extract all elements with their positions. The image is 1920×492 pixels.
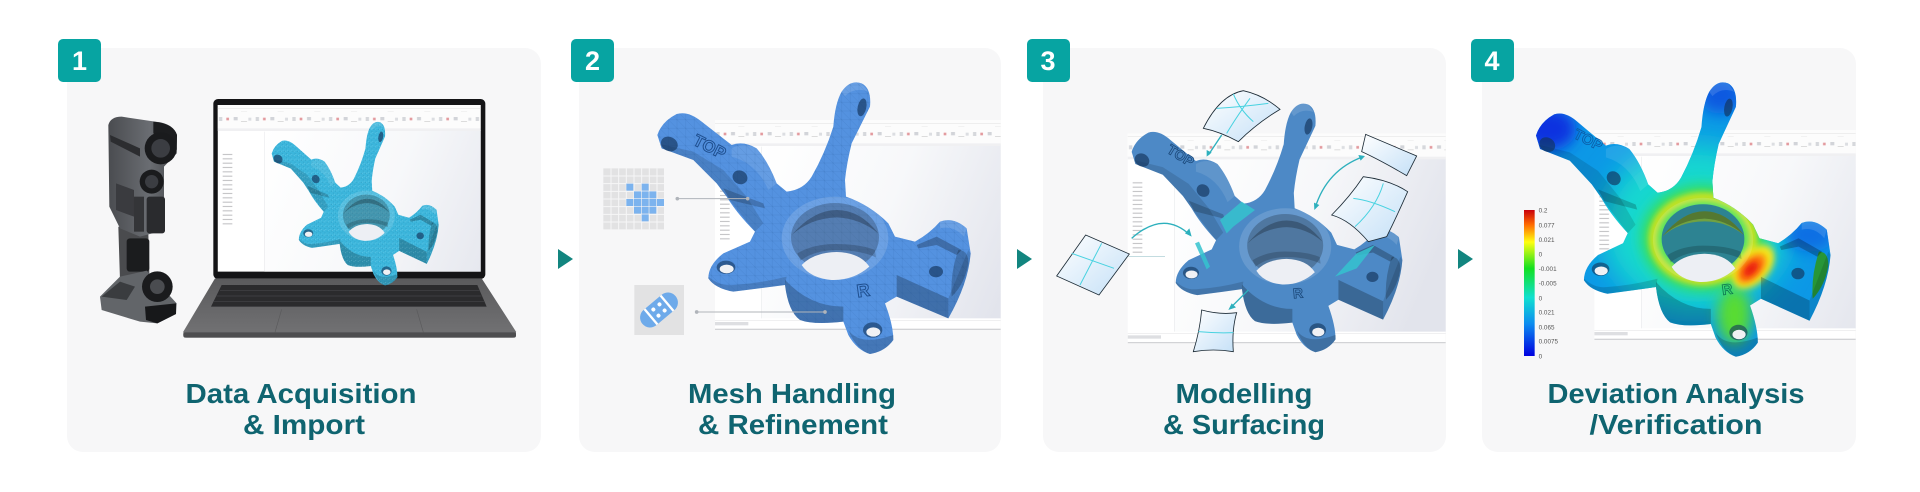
meshed knuckle model: R — [855, 280, 871, 301]
legend: colour scale: 0.065 — [1539, 324, 1555, 331]
icon: handheld 3D scanner — [100, 117, 177, 323]
panel 1 background — [67, 48, 541, 452]
heading: Deviation Analysis /Verification: /Verification — [1590, 409, 1762, 440]
heading: Mesh Handling & Refinement: & Refinement — [698, 409, 888, 440]
heading: Mesh Handling & Refinement: Mesh Handling — [688, 378, 896, 409]
legend: colour scale: 0.077 — [1539, 223, 1555, 230]
leader lines — [676, 197, 826, 313]
legend: colour scale: -0.005 — [1539, 281, 1557, 288]
heading: Modelling & Surfacing — [1163, 378, 1325, 440]
teal arrows — [1128, 135, 1363, 308]
panel: data acquisition — [58, 39, 551, 452]
badge: step 1 — [58, 39, 101, 82]
embossed labels: TOP — [1164, 141, 1197, 170]
surface patches — [1057, 91, 1417, 352]
heading: Data Acquisition & Import: Data Acquisition — [186, 378, 416, 409]
panel 4 background — [1482, 48, 1856, 452]
arrow: step 1 to 2 — [558, 249, 573, 269]
software window — [715, 123, 1001, 330]
patch grid lines — [1072, 94, 1395, 333]
panel: deviation analysis — [1471, 39, 1856, 435]
icon: bandage — [634, 285, 684, 335]
arrow heads — [1185, 150, 1365, 310]
heading: Deviation Analysis /Verification: Deviation Analysis — [1548, 378, 1804, 409]
embossed labels: R — [1292, 284, 1304, 301]
legend: colour scale: 0 — [1539, 353, 1543, 360]
badge: step 1: 1 — [72, 46, 87, 76]
embossed labels: TOP — [1571, 127, 1605, 155]
badge: step 4 — [1471, 39, 1514, 82]
heading: Data Acquisition & Import: & Import — [243, 409, 365, 440]
heading: Modelling & Surfacing: & Surfacing — [1163, 409, 1325, 440]
illustration: mesh refinement — [603, 82, 1048, 354]
meshed knuckle model — [657, 82, 971, 354]
software window — [1128, 133, 1461, 343]
heading: Mesh Handling & Refinement — [688, 378, 896, 440]
legend: colour scale: 0 — [1539, 252, 1543, 259]
scanned knuckle model — [272, 122, 439, 285]
legend: colour scale: 0.0075 — [1539, 339, 1559, 346]
badge: step 2 — [571, 39, 614, 82]
panel 2 background — [579, 48, 1001, 452]
arrow: step 2 to 3 — [1017, 249, 1032, 269]
embossed labels — [1571, 127, 1734, 299]
heading: Modelling & Surfacing: Modelling — [1176, 378, 1312, 409]
heading: Deviation Analysis /Verification — [1548, 378, 1804, 440]
colour map knuckle model — [1520, 77, 1835, 357]
legend: colour scale — [1524, 207, 1559, 360]
legend: colour scale: 0.2 — [1539, 207, 1548, 214]
legend: colour scale: 0 — [1539, 295, 1543, 302]
panel: modelling — [1027, 39, 1461, 452]
panel 3 background — [1043, 48, 1446, 452]
badge: step 4: 4 — [1484, 46, 1500, 76]
teal surface highlights — [1195, 202, 1375, 277]
embossed labels — [1164, 141, 1304, 301]
panel: mesh handling — [571, 39, 1001, 434]
arrow: step 3 to 4 — [1458, 249, 1473, 269]
badge: step 2: 2 — [585, 46, 600, 76]
software window — [1594, 133, 1856, 340]
badge: step 3 — [1027, 39, 1070, 82]
embossed labels: R — [1721, 282, 1734, 299]
icon: laptop — [183, 99, 551, 338]
heading: Data Acquisition & Import — [186, 378, 416, 440]
icon: pixel grid — [603, 168, 664, 229]
legend: colour scale: -0.001 — [1539, 266, 1557, 273]
illustration: deviation map — [1524, 82, 1856, 358]
legend: colour scale: 0.021 — [1539, 310, 1555, 317]
smooth knuckle model — [1132, 104, 1402, 352]
legend: colour scale: 0.021 — [1539, 237, 1555, 244]
badge: step 3: 3 — [1040, 46, 1056, 76]
illustration: surfacing — [1057, 91, 1461, 352]
meshed knuckle model: TOP — [690, 131, 729, 163]
illustration: scanner and laptop — [100, 99, 551, 338]
